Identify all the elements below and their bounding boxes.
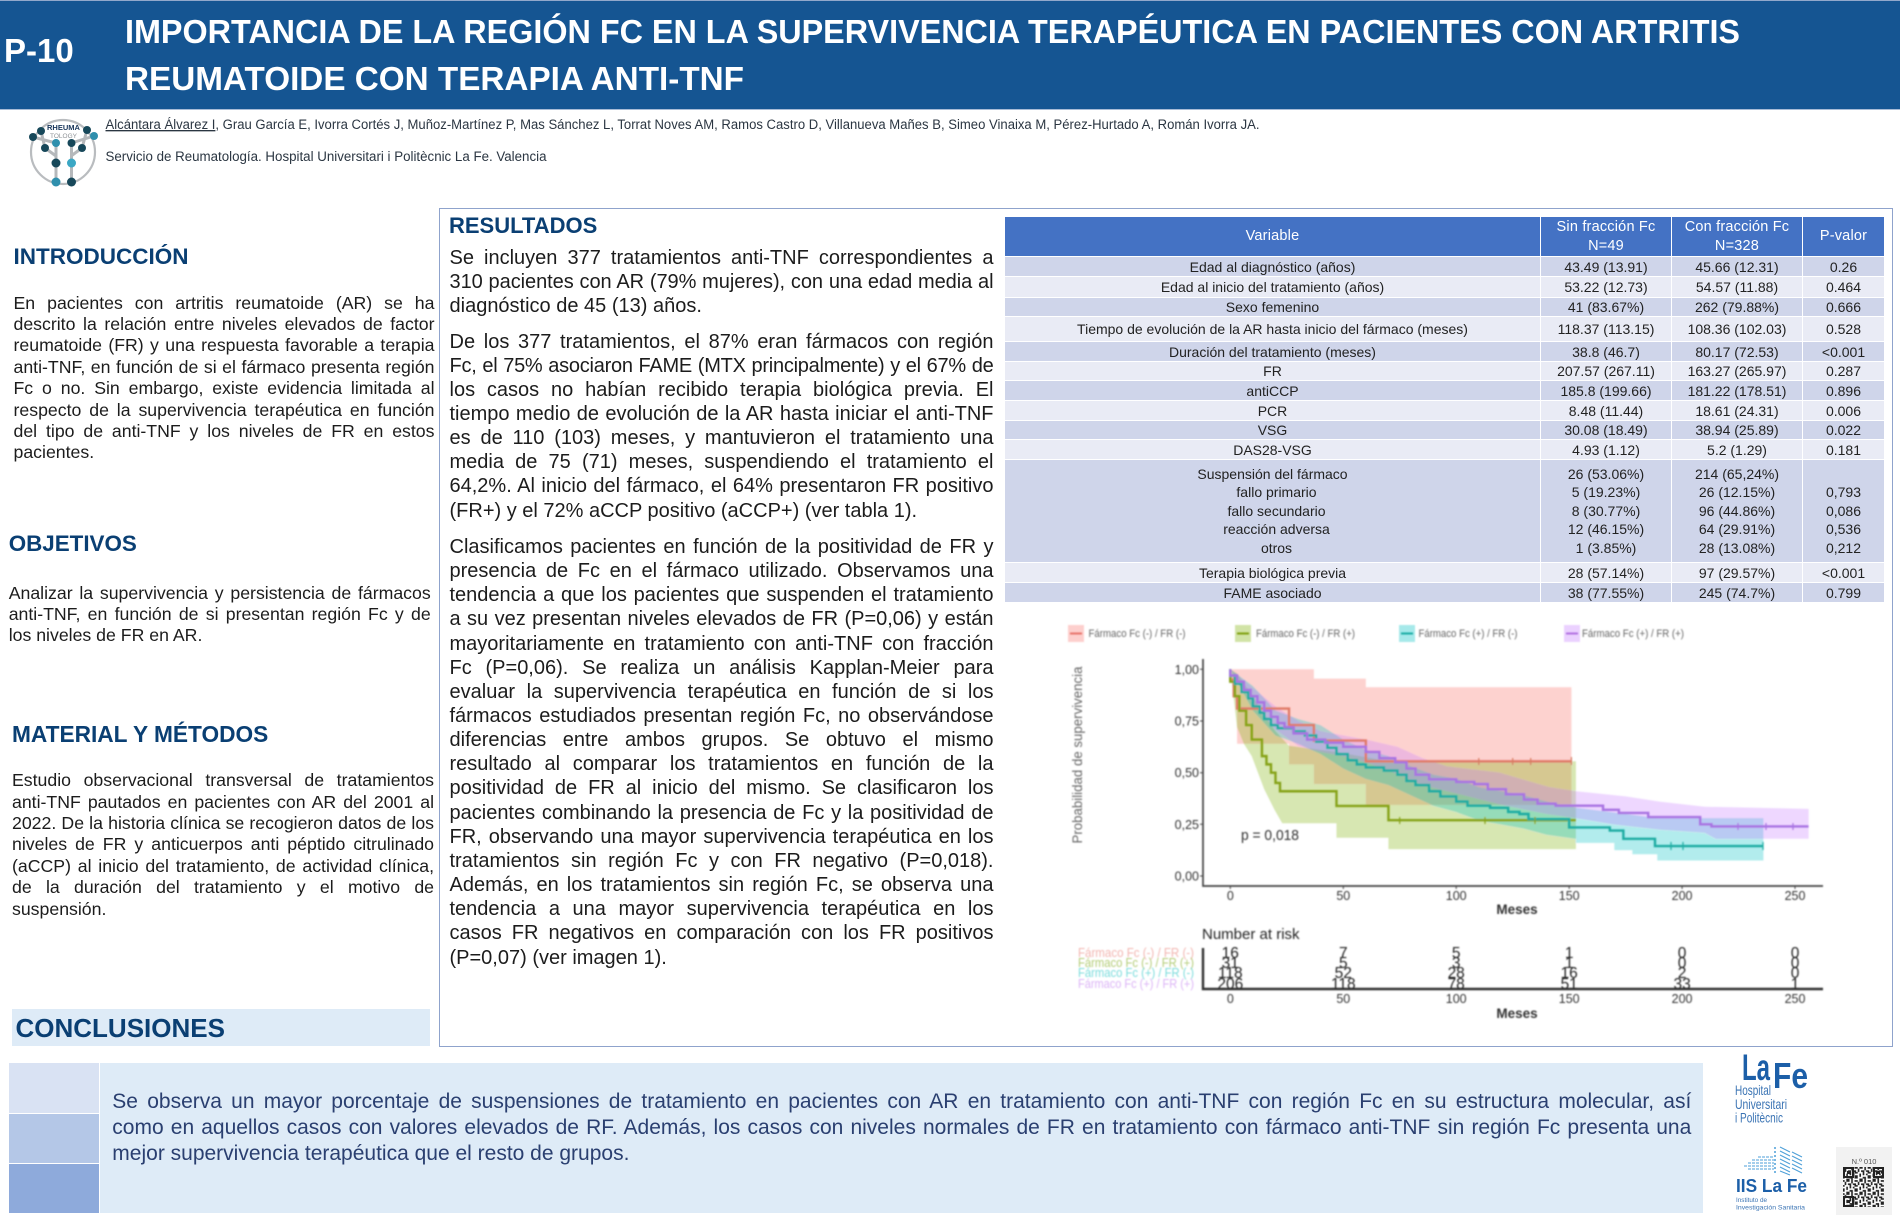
table 1: patient characteristics: 8 (30.77%) (1572, 503, 1640, 519)
table 1: patient characteristics: 262 (79.88%) (1695, 299, 1779, 315)
text: resultados paragraph 2: 64,2%. Al inicio del fármaco, el 64% presentaron FR positivo (450, 475, 994, 497)
text: resultados paragraph 2: media de 75 (71) meses, suspendiendo el tratamiento el (450, 451, 994, 473)
table 1: patient characteristics: 43.49 (13.91) (1564, 258, 1648, 274)
table 1: patient characteristics: 0.666 (1826, 299, 1861, 315)
table 1: patient characteristics: 96 (44.86%) (1699, 503, 1775, 519)
text: introducción: anti-TNF, en función de si el fármaco presenta región (14, 357, 434, 377)
legend: Fármaco Fc (-) / FR (+) (1256, 628, 1355, 640)
risk table numbers: 118 (1218, 965, 1243, 982)
risk table row labels: Fármaco Fc (+) / FR (-) (1078, 966, 1194, 980)
title and poster number: P-10 (4, 32, 74, 69)
table 1: patient characteristics: antiCCP (1246, 382, 1299, 398)
risk table numbers: 1 (1565, 945, 1574, 962)
risk table x tick labels: 250 (1785, 992, 1805, 1006)
risk table numbers: 206 (1217, 976, 1243, 993)
text: resultados paragraph 3: mayoritariamente en tratamiento con anti-TNF con fracción (450, 633, 994, 655)
heading bar: conclusiones (12, 1009, 430, 1046)
risk table numbers: 0 (1678, 955, 1687, 972)
table 1: patient characteristics: 0.022 (1826, 422, 1861, 438)
legend (1068, 625, 1684, 642)
table 1: patient characteristics: 54.57 (11.88) (1696, 279, 1778, 295)
survival plot confidence bands and curves (1230, 669, 1809, 860)
table 1: patient characteristics: VSG (1258, 422, 1287, 438)
authors and affiliation (106, 117, 1260, 164)
table 1: patient characteristics: 245 (74.7%) (1699, 584, 1775, 600)
table 1: patient characteristics: 0.799 (1826, 584, 1861, 600)
text: resultados paragraph 3: tratamientos sin región Fc y con FR negativo (P=0,018). (450, 850, 994, 872)
table 1: patient characteristics: 0,536 (1826, 521, 1861, 537)
heading: objetivos: OBJETIVOS (9, 531, 137, 556)
text: resultados paragraph 3: (P=0,07) (ver imagen 1). (450, 947, 667, 969)
axis tick labels: 0,75 (1175, 714, 1199, 728)
table 1: patient characteristics (1005, 217, 1884, 602)
text: material y métodos: anti-TNF pautados en pacientes con AR del 2001 al (12, 792, 434, 812)
table 1: patient characteristics: Suspensión del fármaco (1197, 466, 1348, 482)
table 1: patient characteristics: 214 (65,24%) (1695, 466, 1779, 482)
text: material y métodos: Estudio observacional transversal de tratamientos (12, 770, 434, 790)
table 1: patient characteristics: <0.001 (1822, 344, 1865, 360)
axes of the survival plot (1200, 659, 1823, 889)
table 1: patient characteristics: Edad al diagnóstico (años) (1190, 258, 1355, 274)
text: resultados paragraph 1 (450, 247, 994, 317)
table 1: patient characteristics: 41 (83.67%) (1568, 299, 1644, 315)
axis tick labels (1175, 663, 1805, 903)
text: resultados paragraph 3: Además, en los tratamientos sin región Fc, se observa una (450, 874, 994, 896)
text: material y métodos: suspensión. (12, 899, 106, 919)
risk table numbers: 51 (1561, 976, 1578, 993)
axis tick labels: 0 (1227, 889, 1234, 903)
table 1: patient characteristics: 0.464 (1826, 279, 1861, 295)
heading text: conclusiones: CONCLUSIONES (16, 1013, 225, 1043)
table 1: patient characteristics: 118.37 (113.15) (1558, 321, 1654, 337)
table 1: patient characteristics: 38 (77.55%) (1568, 584, 1644, 600)
text: resultados paragraph 2: los casos no habían recibido terapia biológica previa. El (450, 379, 994, 401)
x-axis title: Meses (1496, 902, 1538, 917)
text: material y métodos: 2022. De la historia clínica se recogieron datos de los (12, 813, 434, 833)
table 1: patient characteristics: 163.27 (265.97) (1688, 363, 1786, 379)
table 1: patient characteristics: FR (1263, 363, 1282, 379)
table 1: patient characteristics: 0.896 (1826, 382, 1861, 398)
text: introducción: En pacientes con artritis reumatoide (AR) se ha (14, 293, 434, 313)
table 1: patient characteristics: 207.57 (267.11) (1557, 363, 1655, 379)
text: introducción: reumatoide (FR) y una respuesta favorable a terapia (14, 335, 434, 355)
table 1: patient characteristics: 0,793 (1826, 484, 1861, 500)
risk table numbers (1217, 945, 1800, 993)
risk table row labels (1078, 946, 1194, 991)
text: resultados paragraph 1: diagnóstico de 45 (13) años. (450, 295, 702, 317)
text: resultados paragraph 3: evaluar la supervivencia terapéutica en función de si los (450, 681, 994, 703)
risk table numbers: 1 (1791, 976, 1799, 993)
table 1: patient characteristics: 1 (3.85%) (1576, 540, 1636, 556)
table 1: patient characteristics: 97 (29.57%) (1699, 564, 1775, 580)
text: resultados paragraph 3 (450, 536, 994, 969)
text: objetivos: los niveles de FR en AR. (9, 625, 202, 645)
text: resultados paragraph 3: resultado al comparar los tratamientos en función de la (450, 753, 994, 775)
table 1: patient characteristics: 0,086 (1826, 503, 1861, 519)
text: introducción: pacientes. (14, 442, 94, 462)
table 1: patient characteristics: DAS28-VSG (1233, 442, 1312, 458)
table 1: patient characteristics: 28 (13.08%) (1699, 540, 1775, 556)
logos: La Fe hospital, IIS La Fe and QR (1735, 1050, 1892, 1215)
text: introducción: Fc o no. Sin embargo, existe evidencia limitada al (14, 378, 434, 398)
heading: resultados: RESULTADOS (449, 213, 597, 238)
text: resultados paragraph 3: positividad de FR al inicio del mismo. Se clasificaron los (450, 777, 994, 799)
table 1: patient characteristics: Con fracción Fc (1685, 218, 1789, 234)
legend: Fármaco Fc (+) / FR (-) (1418, 628, 1518, 640)
table 1: patient characteristics: 0.006 (1826, 402, 1861, 418)
chart: Kaplan-Meier survival curves with risk table (1068, 624, 1824, 1021)
table 1: patient characteristics: 12 (46.15%) (1568, 521, 1644, 537)
table 1: patient characteristics: reacción adversa (1223, 521, 1330, 537)
table 1: patient characteristics: 108.36 (102.03) (1688, 321, 1786, 337)
logo: La Fe: Fe (1773, 1055, 1808, 1096)
text: conclusions: como en aquellos casos con valores elevados de RF. Además, los casos con niveles normales de FR en tratamiento con fármaco anti-TNF sin región Fc presenta una (112, 1116, 1691, 1139)
table 1: patient characteristics: 5.2 (1.29) (1707, 442, 1767, 458)
risk table numbers: 5 (1452, 945, 1461, 962)
icon: IIS building (1744, 1147, 1802, 1175)
authors and affiliation: Alcántara Álvarez I, Grau García E, Ivorra Cortés J, Muñoz-Martínez P, Mas Sánchez L, Torrat Noves AM, Ramos Castro D, Villanueva Mañes B, Simeo Vinaixa M, Pérez-Hurtado A, Román Ivorra JA. (106, 117, 1260, 132)
text: resultados paragraph 2: (FR+) y el 72% aCCP positivo (aCCP+) (ver tabla 1). (450, 500, 917, 522)
text: objetivos: anti-TNF, en función de si presentan región Fc y de (9, 604, 431, 624)
logo: IIS La Fe (1736, 1176, 1807, 1212)
risk table numbers: 5 (1339, 955, 1348, 972)
table 1: patient characteristics: 185.8 (199.66) (1560, 382, 1652, 398)
axis tick labels: 0,00 (1175, 870, 1199, 884)
table 1: patient characteristics: 4.93 (1.12) (1572, 442, 1640, 458)
table 1: patient characteristics: 0.181 (1826, 442, 1861, 458)
table 1: patient characteristics: 53.22 (12.73) (1564, 279, 1648, 295)
decorative colour squares (9, 1063, 99, 1213)
text: resultados paragraph 2: Fc, el 75% asociaron FAME (MTX principalmente) y el 67% de (450, 355, 994, 377)
text: objetivos (8, 583, 431, 645)
text: introducción (14, 293, 434, 462)
p value: p = 0,018 (1241, 827, 1299, 844)
table 1: patient characteristics: 26 (12.15%) (1699, 484, 1775, 500)
table 1: patient characteristics: 38.94 (25.89) (1695, 422, 1779, 438)
logo: La Fe (1735, 1047, 1808, 1126)
risk table numbers: 0 (1678, 945, 1687, 962)
text: resultados paragraph 3: Clasificamos pacientes en función de la positividad de FR y (450, 536, 994, 558)
text: conclusions (112, 1090, 1692, 1165)
axis tick labels: 0,25 (1175, 818, 1199, 832)
table 1: patient characteristics: P-valor (1820, 228, 1867, 244)
text: material y métodos (12, 770, 434, 919)
title and poster number: REUMATOIDE CON TERAPIA ANTI-TNF (125, 60, 744, 97)
risk table x tick labels: 150 (1559, 992, 1580, 1006)
number at risk title: Number at risk (1202, 926, 1300, 943)
panel: conclusions text (100, 1063, 1703, 1213)
risk table numbers: 52 (1335, 965, 1352, 982)
heading: introducción: INTRODUCCIÓN (14, 244, 188, 269)
title and poster number: IMPORTANCIA DE LA REGIÓN FC EN LA SUPERVIVENCIA TERAPÉUTICA EN PACIENTES CON ARTRITIS (125, 13, 1740, 50)
table 1: patient characteristics: fallo primario (1236, 484, 1317, 500)
axis tick labels: 250 (1785, 889, 1805, 903)
risk table numbers: 7 (1339, 945, 1348, 962)
table 1: patient characteristics: 0,212 (1826, 540, 1861, 556)
axis tick labels: 150 (1559, 889, 1580, 903)
logo: IIS La Fe: IIS La Fe (1736, 1176, 1807, 1196)
table 1: patient characteristics: 0.26 (1830, 258, 1857, 274)
axis tick labels: 1,00 (1175, 663, 1199, 677)
text: resultados paragraph 2: De los 377 tratamientos, el 87% eran fármacos con región (450, 331, 994, 353)
text: introducción: descrito la relación entre niveles elevados de factor (14, 314, 434, 334)
text: resultados paragraph 2 (450, 331, 994, 522)
text: material y métodos: de la duración del tratamiento y el motivo de (12, 877, 434, 897)
risk table x tick labels: 50 (1336, 992, 1350, 1006)
table 1: patient characteristics: Variable (1246, 228, 1299, 244)
risk table numbers: 16 (1561, 965, 1578, 982)
y-axis title: Probabilidad de supervivencia (1070, 666, 1085, 844)
QR code: N.º 010 (1852, 1157, 1876, 1166)
logo: IIS La Fe: Instituto de (1736, 1197, 1767, 1204)
text: resultados paragraph 3: pacientes combinando la presencia de Fc y la positividad de (450, 802, 994, 824)
table 1: patient characteristics: PCR (1258, 402, 1287, 418)
table 1: patient characteristics: Terapia biológica previa (1199, 564, 1346, 580)
text: resultados paragraph 3: tendencia a que los pacientes que suspenden el tratamiento (450, 584, 994, 606)
text: material y métodos: (aCCP) al inicio del tratamiento, de actividad clínica, (12, 856, 434, 876)
authors and affiliation: Servicio de Reumatología. Hospital Universitari i Politècnic La Fe. Valencia (106, 149, 547, 164)
text: objetivos: Analizar la supervivencia y persistencia de fármacos (9, 583, 431, 603)
table 1: patient characteristics: 80.17 (72.53) (1695, 344, 1779, 360)
risk table x tick labels: 0 (1227, 992, 1234, 1006)
risk table numbers: 33 (1673, 976, 1691, 993)
risk table numbers: 1 (1565, 955, 1574, 972)
table 1: patient characteristics: N=49 (1588, 238, 1624, 254)
text: introducción: del tipo de anti-TNF y los niveles de FR en estos (14, 421, 434, 441)
risk table x-axis title: Meses (1496, 1006, 1538, 1021)
table 1: patient characteristics: 8.48 (11.44) (1569, 402, 1643, 418)
table 1: patient characteristics: 45.66 (12.31) (1695, 258, 1779, 274)
table 1: patient characteristics: 0.287 (1826, 363, 1861, 379)
risk table numbers: 78 (1448, 976, 1465, 993)
risk table x tick labels: 100 (1446, 992, 1467, 1006)
table 1: patient characteristics: 0.528 (1826, 321, 1861, 337)
table 1: patient characteristics: <0.001 (1822, 564, 1865, 580)
text: resultados paragraph 3: diferencias entre ambos grupos. Se obtuvo el mismo (450, 729, 994, 751)
table 1: patient characteristics: 18.61 (24.31) (1695, 402, 1779, 418)
header banner (0, 0, 1900, 110)
legend: Fármaco Fc (+) / FR (+) (1582, 628, 1684, 640)
axis tick labels: 100 (1446, 889, 1467, 903)
risk table numbers: 31 (1222, 955, 1239, 972)
risk table numbers: 0 (1791, 965, 1800, 982)
table 1: patient characteristics: Sin fracción Fc (1557, 218, 1655, 234)
axis tick labels: 200 (1672, 889, 1693, 903)
panel: resultados (439, 208, 1893, 1047)
table 1: patient characteristics: 28 (57.14%) (1568, 564, 1644, 580)
table 1: patient characteristics: Duración del tratamiento (meses) (1169, 344, 1376, 360)
logo: La Fe: i Politècnic (1735, 1110, 1783, 1126)
text: resultados paragraph 3: fármacos estudiados presentan región Fc, no observándose (450, 705, 994, 727)
legend: Fármaco Fc (-) / FR (-) (1088, 628, 1186, 640)
title and poster number (4, 13, 1740, 97)
heading: material y métodos: MATERIAL Y MÉTODOS (12, 721, 268, 747)
QR code (1836, 1147, 1892, 1215)
risk table numbers: 3 (1452, 955, 1461, 972)
logo: IIS La Fe: Investigación Sanitaria (1736, 1204, 1805, 1212)
risk table row labels: Fármaco Fc (+) / FR (+) (1078, 977, 1194, 991)
text: introducción: respecto de la supervivencia terapéutica en función (14, 400, 434, 420)
table 1: patient characteristics: FAME asociado (1223, 584, 1322, 600)
risk table numbers: 16 (1222, 945, 1239, 962)
axis tick labels: 0,50 (1175, 766, 1199, 780)
table 1: patient characteristics: 181.22 (178.51) (1688, 382, 1786, 398)
risk table numbers: 0 (1791, 945, 1800, 962)
table 1: patient characteristics: 5 (19.23%) (1572, 484, 1640, 500)
table 1: patient characteristics: Edad al inicio del tratamiento (años) (1161, 279, 1384, 295)
text: conclusions: mejor supervivencia terapéutica que el resto de grupos. (112, 1142, 629, 1165)
text: resultados paragraph 1: Se incluyen 377 tratamientos anti-TNF correspondientes a (450, 247, 994, 269)
risk table row labels: Fármaco Fc (-) / FR (+) (1078, 956, 1194, 970)
risk table numbers: 2 (1678, 965, 1686, 982)
text: conclusions: Se observa un mayor porcentaje de suspensiones de tratamiento en pacientes con AR en tratamiento con anti-TNF con región Fc en su estructura molecular, así (112, 1090, 1691, 1113)
table 1: patient characteristics: Tiempo de evolución de la AR hasta inicio del fármaco (meses) (1077, 321, 1468, 337)
table 1: patient characteristics: Sexo femenino (1226, 299, 1319, 315)
text: material y métodos: niveles de FR y anticuerpos anti péptido citrulinado (12, 834, 434, 854)
text: resultados paragraph 2: tiempo medio de evolución de la AR hasta iniciar el anti-TNF (450, 403, 994, 425)
table 1: patient characteristics: fallo secundario (1227, 503, 1326, 519)
logo: La Fe: Hospital (1735, 1082, 1771, 1098)
text: resultados paragraph 3: tendencia a una mayor supervivencia terapéutica en los (450, 898, 994, 920)
risk table x tick labels: 200 (1672, 992, 1693, 1006)
logo: La Fe: Universitari (1735, 1096, 1787, 1112)
table 1: patient characteristics: 38.8 (46.7) (1572, 344, 1640, 360)
text: resultados paragraph 3: presencia de Fc en el fármaco utilizado. Observamos una (450, 560, 994, 582)
risk table numbers: 28 (1448, 965, 1465, 982)
text: resultados paragraph 3: FR, observando una mayor supervivencia terapéutica en los (450, 826, 994, 848)
risk table row labels: Fármaco Fc (-) / FR (-) (1078, 946, 1194, 960)
risk table numbers: 0 (1791, 955, 1800, 972)
risk table x tick labels (1227, 992, 1805, 1006)
axis tick labels: 50 (1336, 889, 1350, 903)
text: resultados paragraph 3: a su vez presentan niveles elevados de FR (P=0,06) y están (450, 608, 994, 630)
text: resultados paragraph 1: 310 pacientes con AR (79% mujeres), con una edad media al (450, 271, 994, 293)
text: resultados paragraph 2: es de 110 (103) meses, y mantuvieron el tratamiento una (450, 427, 994, 449)
censoring marks (1479, 757, 1571, 765)
text: resultados paragraph 3: Fc (P=0,06). Se realiza un análisis Kapplan-Meier para (450, 657, 994, 679)
table 1: patient characteristics: 26 (53.06%) (1568, 466, 1644, 482)
table 1: patient characteristics: 30.08 (18.49) (1564, 422, 1648, 438)
icon: rheumatology logo: TOLOGY (50, 133, 78, 140)
table 1: patient characteristics: N=328 (1715, 238, 1759, 254)
risk table numbers: 118 (1331, 976, 1356, 993)
icon: rheumatology logo: RHEUMA (47, 125, 80, 132)
risk table axis (1203, 948, 1823, 989)
table 1: patient characteristics: otros (1261, 540, 1292, 556)
text: resultados paragraph 3: casos FR negativos en comparación con los FR positivos (450, 922, 994, 944)
table 1: patient characteristics: 64 (29.91%) (1699, 521, 1775, 537)
icon: rheumatology logo (29, 118, 98, 186)
